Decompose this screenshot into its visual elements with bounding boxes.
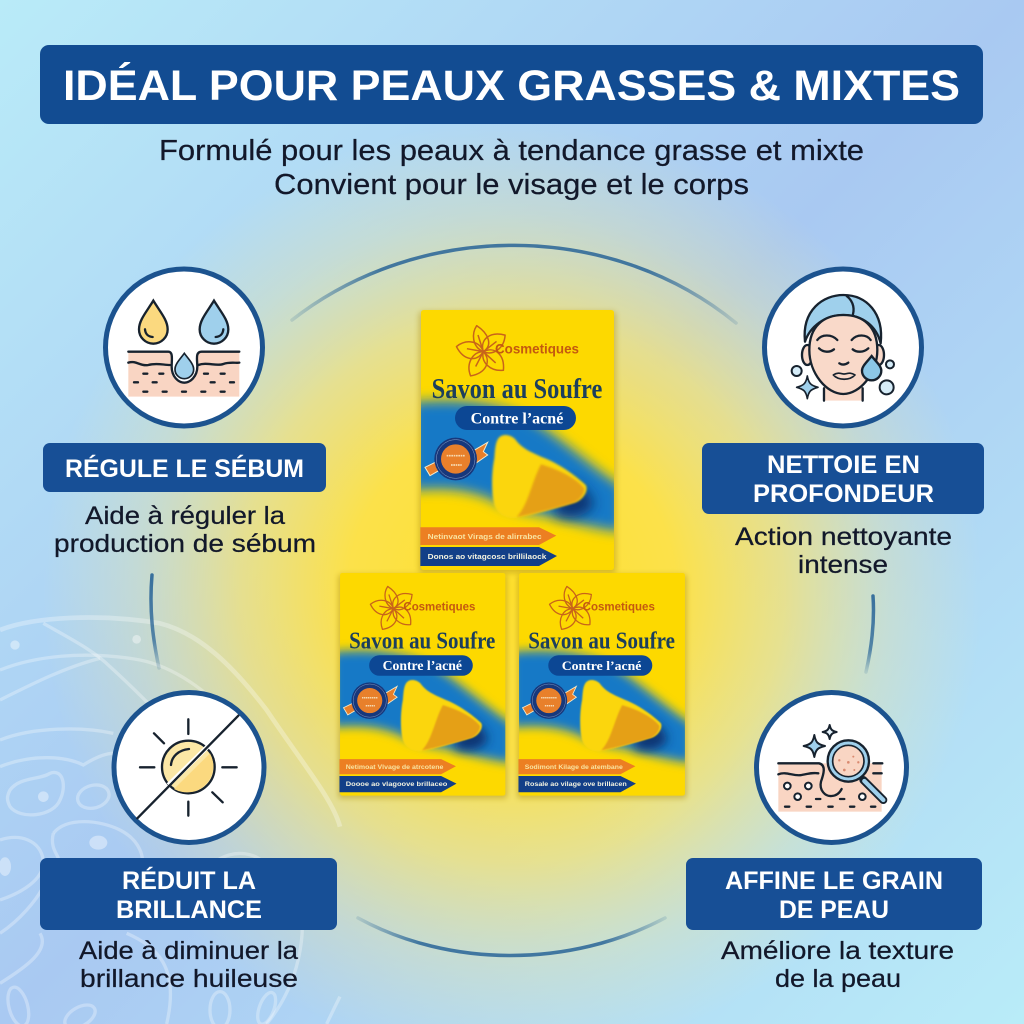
arrow: orange: Netinvaot Virags de alirrabec <box>428 532 542 541</box>
icon: clean face <box>764 269 922 426</box>
product name: Savon au Soufre <box>432 373 602 405</box>
panel: régule le sébum <box>43 269 326 558</box>
panel: affine le grain de peau <box>686 692 982 993</box>
heading: RÉGULE LE SÉBUM <box>65 454 304 483</box>
logo flower <box>369 586 416 633</box>
pill: contre l'acné <box>369 655 473 676</box>
badge <box>425 438 488 480</box>
soap block <box>580 680 661 751</box>
arrow: navy <box>420 547 557 566</box>
arrow: navy <box>518 776 636 792</box>
heading <box>686 858 982 930</box>
description: Action nettoyante <box>735 523 952 551</box>
description: Aide à réguler la <box>85 502 285 530</box>
title banner <box>40 45 983 124</box>
description <box>79 937 298 993</box>
brand name: Cosmetiques <box>583 599 655 613</box>
heading: NETTOIE EN <box>767 451 920 479</box>
logo flower <box>548 586 595 633</box>
description <box>735 523 952 579</box>
badge <box>522 682 576 719</box>
description: de la peau <box>775 965 901 993</box>
pill: contre l'acné: Contre l’acné <box>562 658 642 673</box>
arrow: navy: Donos ao vitagcosc brillilaock <box>428 552 547 561</box>
subtitle <box>159 135 864 201</box>
heading: PROFONDEUR <box>753 480 934 508</box>
heading <box>702 443 984 514</box>
icon: skin under magnifier <box>756 692 906 842</box>
description <box>721 937 954 993</box>
product name: Savon au Soufre <box>528 627 675 654</box>
panel: nettoie en profondeur <box>702 269 984 579</box>
decorative skin-cell pattern <box>0 618 340 1024</box>
soap block <box>401 680 482 751</box>
badge <box>343 682 397 719</box>
pill: contre l'acné <box>455 406 576 430</box>
pill: contre l'acné: Contre l’acné <box>383 658 462 673</box>
description: Aide à diminuer la <box>79 937 298 965</box>
arrow: orange: Netimoat Vlvage de atrcotene <box>346 764 444 771</box>
pill: contre l'acné <box>548 655 652 676</box>
arrow: orange: Sodimont Kilage de atembane <box>525 764 623 771</box>
brand name: Cosmetiques <box>495 341 579 357</box>
arrow: orange <box>518 759 635 774</box>
product box: top <box>412 310 622 573</box>
heading <box>43 443 326 492</box>
arrow: navy: Doooe ao vlagoove brillaceo <box>346 781 447 788</box>
arrow: navy <box>339 776 457 792</box>
title banner: IDÉAL POUR PEAUX GRASSES & MIXTES <box>63 62 960 110</box>
pill: contre l'acné: Contre l’acné <box>471 410 564 427</box>
description <box>54 502 316 558</box>
logo flower <box>455 326 510 380</box>
icon: crossed-out sun <box>114 692 264 842</box>
heading: BRILLANCE <box>116 896 262 924</box>
arrow: orange <box>339 759 456 774</box>
heading: DE PEAU <box>779 896 889 924</box>
arrow: navy: Rosale ao vilage ove brillacen <box>525 781 627 788</box>
description: production de sébum <box>54 530 316 558</box>
soap block <box>492 435 587 518</box>
connecting arcs around products <box>151 245 874 956</box>
brand name: Cosmetiques <box>403 599 476 613</box>
panel: réduit la brillance <box>40 692 337 993</box>
subtitle: Formulé pour les peaux à tendance grasse et mixte <box>159 135 864 167</box>
heading <box>40 858 337 930</box>
heading: RÉDUIT LA <box>122 866 256 895</box>
description: brillance huileuse <box>80 965 298 993</box>
product name: Savon au Soufre <box>349 627 495 654</box>
description: Améliore la texture <box>721 937 954 965</box>
product box: bottom right <box>511 573 692 799</box>
arrow: orange <box>420 527 556 545</box>
description: intense <box>798 551 888 579</box>
subtitle: Convient pour le visage et le corps <box>274 169 749 201</box>
heading: AFFINE LE GRAIN <box>725 867 943 895</box>
product box: bottom left <box>332 573 512 799</box>
icon: oil and water drops on skin pore <box>106 269 262 426</box>
